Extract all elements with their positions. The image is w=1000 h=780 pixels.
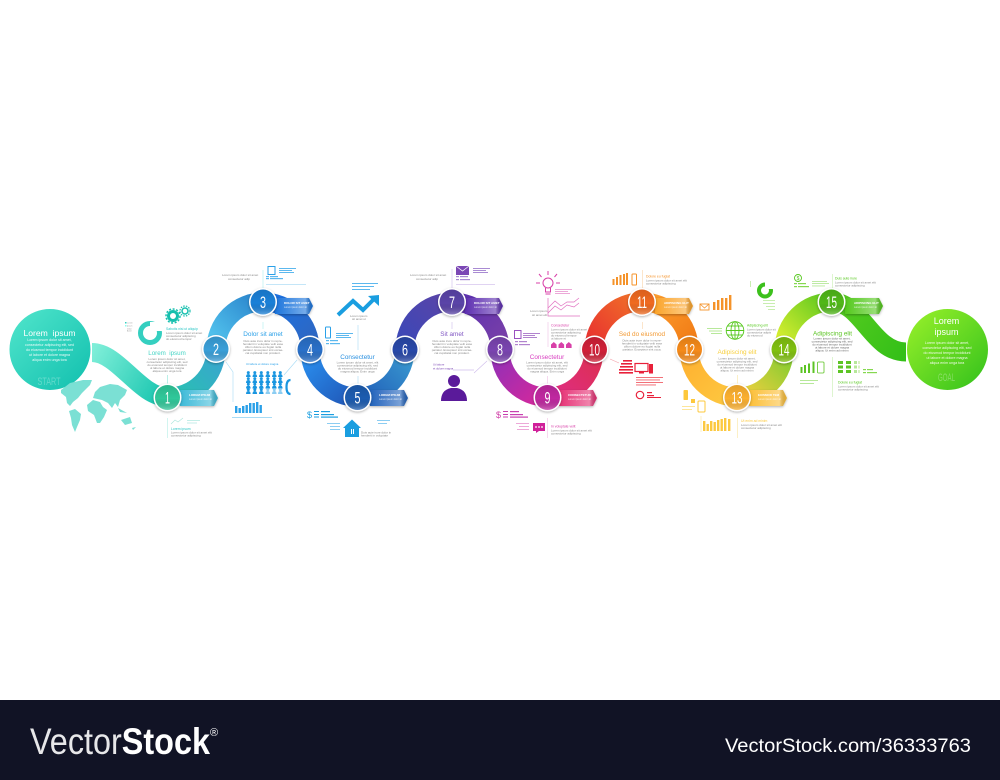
heading: adipiscing elit: Lorem ipsum dolor sit amet, <box>718 356 756 360</box>
connector <box>166 375 168 384</box>
node 6 <box>391 336 419 364</box>
node 7 <box>438 288 466 316</box>
tag 5: Lorem ipsum dolor sit <box>379 398 402 401</box>
heading: sit amet: cat cupidatat non proident. <box>434 351 470 355</box>
start circle: aliqua enim unga tora <box>32 358 67 362</box>
start circle: do eiusmod tempor incididunt <box>26 348 73 352</box>
note: in voluptate velit: In voluptate velit <box>551 424 576 428</box>
globe note: Adipiscing elit <box>747 324 768 328</box>
icon: globe <box>726 322 744 339</box>
note: dolore eu fugiat <box>646 274 687 286</box>
note: consectetur small: Lorem ipsum dolor sit amet <box>551 328 587 332</box>
globe note: do eiusmod <box>747 334 763 338</box>
icon: person <box>441 375 467 401</box>
pie legend: Lorem <box>127 322 133 324</box>
heading: adipiscing elit <box>812 330 853 352</box>
heading: sed do eiusmod: Sed do eiusmod <box>619 331 666 338</box>
tag 7 <box>465 298 503 314</box>
heading: consectetur: magna aliqua. Enim unga <box>530 370 564 374</box>
heading: sed do eiusmod: cillum dolore eu fugiat nulla <box>624 344 661 348</box>
note: consectetur small: Consectetur <box>551 324 570 328</box>
heading: adipiscing elit: ut labore et dolore magna <box>720 366 754 370</box>
heading and body: ut labore et dolore magna <box>150 366 184 370</box>
heading: adipiscing elit: consectetur adipiscing elit, sed <box>812 340 853 344</box>
goal circle: ipsum <box>934 327 959 337</box>
line chart <box>548 298 580 316</box>
icon: dollar coin: $ <box>797 276 800 282</box>
icon: house <box>343 420 361 437</box>
note: duis aute irure: Duis aute irure <box>835 276 857 280</box>
node 9: 9 <box>544 390 550 408</box>
note: dolore eu fugiat: Lorem ipsum dolor sit amet elit <box>838 384 879 388</box>
start circle: START <box>38 376 61 388</box>
goal circle: do eiusmod tempor incididunt <box>924 351 970 355</box>
tag 9: Lorem ipsum dolor sit <box>568 398 591 401</box>
heading and body: aliqua enim unga tora <box>153 369 182 373</box>
node 12 <box>676 336 704 364</box>
note below node 1: Lorem ipsum dolor sit amet elit <box>171 430 212 434</box>
note: in voluptate velit: Lorem ipsum dolor sit amet elit <box>551 428 592 432</box>
note: dolore eu fugiat <box>838 380 879 392</box>
node 4 <box>296 336 324 364</box>
node 4: 4 <box>307 342 313 360</box>
tag 1: Lorem ipsum dolor sit <box>189 398 212 401</box>
heading: sed do eiusmod: Duis aute irure dolor in repre- <box>622 338 662 342</box>
note: consectetur small: consectetur adipiscing <box>551 330 581 334</box>
arrow tags <box>180 298 883 406</box>
step 1 details <box>125 306 212 438</box>
heading and body: do eiusmod tempor incididunt <box>147 363 187 367</box>
chart note: sit amet elit <box>532 313 547 317</box>
note below node 1: Lorem ipsum <box>171 427 191 431</box>
dot grid <box>838 361 877 373</box>
heading: consectetur: consectetur adipiscing elit, sed <box>527 364 568 368</box>
note: dolore eu fugiat: Dolore eu fugiat <box>646 274 670 278</box>
pie legend: Dolor <box>127 328 132 330</box>
top note left: consectetur adip <box>228 277 250 281</box>
tag 7: DOLOR SIT AMET <box>474 301 500 305</box>
heading: adipiscing elit: aliqua. Ut enim ad minim <box>720 368 754 372</box>
note: consectetur small: ut labore et <box>551 336 566 340</box>
node 11: 11 <box>637 294 647 312</box>
heading: sed do eiusmod: henderit in voluptate velit esse <box>622 342 663 346</box>
node 12: 12 <box>684 342 695 360</box>
step 14-15 details <box>750 274 879 397</box>
footer id: VectorStock.com/36333763 <box>725 736 971 757</box>
top note left <box>410 273 446 281</box>
footer logo: VectorStock <box>30 721 210 762</box>
node 7: 7 <box>449 294 455 312</box>
note: in voluptate velit: consectetur adipiscing <box>551 432 581 436</box>
heading: sit amet: Duis aute irure dolor in repre- <box>432 339 472 343</box>
node 3: 3 <box>260 294 266 312</box>
heading: consectetur: do eiusmod tempor incididunt <box>338 366 377 370</box>
footer logo: ® <box>210 727 218 739</box>
note: duis aute irure <box>835 276 876 288</box>
heading: dolor sit amet: pariatur. Excepteur sint occae- <box>243 348 283 352</box>
chart note: Lorem ipsum <box>530 309 548 313</box>
icon: envelope orange <box>700 304 709 310</box>
heading: dolor sit amet: Duis aute irure dolor in repre- <box>243 339 283 343</box>
note: ut enim ad minim <box>741 419 782 430</box>
icon: gears <box>166 306 190 323</box>
node 13: 13 <box>732 390 742 408</box>
heading: dolor sit amet: Dolor sit amet <box>243 331 283 338</box>
coin note <box>794 283 809 287</box>
heading: consectetur: Consectetur <box>530 354 565 361</box>
heading: sed do eiusmod: pariatur. Excepteur sint occa. <box>623 348 662 352</box>
heading: adipiscing elit: do eiusmod tempor incididunt <box>812 342 852 346</box>
envelope note <box>456 268 495 285</box>
note: in voluptate velit <box>551 424 592 436</box>
node 1: 1 <box>165 390 170 408</box>
note: duis aute irure: Lorem ipsum dolor sit amet elit <box>835 280 876 284</box>
heading: dolor sit amet: cat cupidatat non proident. <box>245 351 281 355</box>
globe note: Lorem ipsum dolor sit <box>747 328 776 332</box>
icon: envelope <box>456 266 469 275</box>
note: ut enim ad minim: Ut enim ad minim <box>741 419 768 423</box>
goal circle <box>906 308 988 390</box>
node 10 <box>580 336 608 364</box>
house notes <box>327 420 390 430</box>
note: ut enim ad minim: consectetur adipiscing <box>741 426 771 430</box>
start circle: consectetur adipiscing elit, sed <box>25 343 74 347</box>
step 2-3 details <box>222 266 306 418</box>
top note left: Lorem ipsum dolor sit amet <box>222 273 258 277</box>
red icon: coin with lines <box>636 391 661 399</box>
heading: sit amet: cillum dolore eu fugiat nulla <box>434 345 471 349</box>
person note <box>433 361 487 373</box>
heading: consectetur: consectetur adipiscing elit, sed <box>337 364 378 368</box>
icon: computer stack <box>610 359 653 374</box>
chart note <box>530 309 548 317</box>
heading: dolor sit amet <box>243 331 284 355</box>
person note: Ut labore <box>433 362 445 366</box>
node 9 <box>534 384 562 412</box>
node 2: 2 <box>213 341 219 359</box>
tag 11: ADIPISCING ELIT <box>664 301 689 305</box>
orange bar chart <box>713 295 731 310</box>
tag 9: CONSECTETUR <box>568 393 592 397</box>
tag 7: Lorem ipsum dolor sit <box>474 306 497 309</box>
step 4-5 details <box>307 283 392 438</box>
tag 9 <box>559 390 597 406</box>
goal circle: Lorem <box>934 316 959 326</box>
heading: consectetur <box>526 354 568 374</box>
node 5: 5 <box>354 390 360 408</box>
note: consectetur small: do eiusmod tempor <box>551 334 577 338</box>
goal circle: ut labore et dolore magna <box>927 356 967 360</box>
heading: consectetur <box>337 354 379 374</box>
heading and body <box>147 350 188 373</box>
icon: light bulb <box>536 271 560 294</box>
heading: consectetur: Consectetur <box>340 354 376 361</box>
bulb note <box>555 289 572 294</box>
note below node 1: consectetur adipiscing <box>171 434 201 438</box>
tag 3 <box>275 298 313 314</box>
note: sabotis: do eiusmod tempor <box>166 337 192 341</box>
note: duis aute irure: consectetur adipiscing <box>835 284 865 288</box>
top note left: Lorem ipsum dolor sit amet <box>410 273 446 277</box>
heading: sit amet <box>432 331 473 355</box>
heading: dolor sit amet: cillum dolore eu fugiat nulla <box>245 345 282 349</box>
note: ut enim ad minim: Lorem ipsum dolor sit amet elit <box>741 423 782 427</box>
pie chart <box>140 322 163 342</box>
node 15 <box>818 288 846 316</box>
people grid: Ut labore et dolore magna <box>246 362 279 366</box>
icon: mobile <box>326 327 330 338</box>
heading: consectetur: Lorem ipsum dolor sit amet, elit <box>337 360 379 364</box>
tag 15: Lorem ipsum dolor sit <box>854 306 877 309</box>
node 8 <box>486 336 514 364</box>
icon: dollar with lines <box>307 410 338 420</box>
tag 5 <box>370 390 408 406</box>
person note: et dolore magna <box>433 366 454 370</box>
node 8: 8 <box>497 342 503 360</box>
mobile note <box>326 333 353 344</box>
heading: sed do eiusmod <box>619 331 666 352</box>
top note left: consectetur adip <box>416 277 438 281</box>
goal circle: GOAL <box>938 372 955 384</box>
node 3 <box>249 288 277 316</box>
numbered nodes <box>154 288 846 412</box>
step 4-5 details: henderit in voluptate <box>361 434 388 438</box>
heading and body: consectetur adipiscing elit, sed <box>147 360 188 364</box>
node 2 <box>202 335 230 363</box>
icon: world map <box>61 380 136 432</box>
note: dolore eu fugiat: Lorem ipsum dolor sit amet elit <box>646 278 687 282</box>
heading: adipiscing elit: aliqua. Ut enim ad minim <box>815 348 849 352</box>
pie legend: Amet <box>127 330 132 332</box>
heading: adipiscing elit: ut labore et dolore magna <box>815 346 849 350</box>
icon: three houses <box>551 342 572 348</box>
pie legend: Ipsum <box>127 326 133 328</box>
node 1 <box>154 384 182 412</box>
step 12-13 details <box>682 322 782 438</box>
node 14: 14 <box>778 342 790 360</box>
note: sabotis: Sabotis nisi ut aliquip <box>166 327 198 331</box>
tag 3: Lorem ipsum dolor sit <box>284 306 307 309</box>
step 4-5 details: Duis aute irure dolor in <box>361 430 392 434</box>
step 4-5 details: sit amet ut <box>352 317 366 321</box>
step 10-11 details <box>610 270 731 399</box>
connector and bar chart <box>226 362 272 418</box>
heading: adipiscing elit: Lorem ipsum dolor sit amet, <box>813 336 851 340</box>
node 15: 15 <box>826 294 837 312</box>
pie note <box>750 281 775 310</box>
tag 13: EIUSMOD TEM <box>758 393 780 397</box>
note: sabotis <box>166 327 202 341</box>
heading: consectetur: magna aliqua. Enim unga <box>340 370 375 374</box>
start circle: Lorem ipsum dolor sit amet, <box>27 338 72 342</box>
note: dolore eu fugiat: Dolore eu fugiat <box>838 380 862 384</box>
top note right <box>266 268 306 285</box>
note: dolore eu fugiat: consectetur adipiscing <box>838 388 868 392</box>
step 8-9 details <box>496 271 592 438</box>
heading: adipiscing elit: consectetur adipiscing elit, sed <box>717 360 758 364</box>
icon: document <box>268 266 275 274</box>
heading: dolor sit amet: henderit in voluptate velit esse <box>243 342 284 346</box>
orange bars and phone <box>612 273 636 285</box>
heading: sit amet: pariatur. Excepteur sint occae- <box>432 348 472 352</box>
note below node 1 <box>168 418 212 438</box>
note: sabotis: consectetur adipiscing <box>166 334 196 338</box>
globe note: consectetur adipis <box>747 330 772 334</box>
heading: sit amet: Sit amet <box>440 331 464 338</box>
goal circle: consectetur adipiscing elit, sed <box>923 346 971 350</box>
icon: dollar with lines <box>496 410 528 420</box>
people grid <box>246 362 283 394</box>
heading: consectetur: Lorem ipsum dolor sit amet, elit <box>526 360 568 364</box>
tag 13 <box>749 390 787 406</box>
node 13 <box>723 384 751 412</box>
icon: phone handset <box>286 380 290 394</box>
heading and body: Lorem ipsum <box>148 350 186 357</box>
tag 15 <box>845 298 883 314</box>
tag 15: ADIPISCING ELIT <box>854 301 879 305</box>
heading: consectetur: do eiusmod tempor incididunt <box>527 366 567 370</box>
red note <box>636 377 663 385</box>
footer bar <box>0 700 1000 780</box>
heading: adipiscing elit: Adipiscing elit <box>813 330 852 338</box>
yellow bar chart <box>701 416 730 432</box>
icon: doc <box>514 330 521 338</box>
step 6-8 details <box>410 266 540 401</box>
pie legend <box>125 322 133 332</box>
globe note <box>747 324 776 338</box>
goal circle: aliqua enim unga tora <box>930 361 964 365</box>
tag 1: LOREM IPSUM <box>189 393 211 397</box>
icon: rising arrow <box>338 295 379 315</box>
node 10: 10 <box>589 342 600 360</box>
goal circle: Lorem ipsum dolor sit amet, <box>925 341 969 345</box>
arrow note <box>352 283 378 290</box>
heading: adipiscing elit <box>717 349 758 372</box>
chat note <box>516 423 529 430</box>
green bars and tablet <box>800 362 824 373</box>
green pie chart <box>759 282 775 296</box>
node 11 <box>628 288 656 316</box>
node 5 <box>344 384 372 412</box>
heading: sit amet: henderit in voluptate velit esse <box>432 342 473 346</box>
tag 5: LOREM IPSUM <box>379 393 401 397</box>
tag 11 <box>655 298 693 314</box>
heading and body: Lorem ipsum dolor sit amet, <box>148 357 186 361</box>
heading: adipiscing elit: Adipiscing elit <box>717 349 757 356</box>
tag 11: Lorem ipsum dolor sit <box>664 306 687 309</box>
yellow devices <box>682 390 705 412</box>
note: dolore eu fugiat: consectetur adipiscing <box>646 282 676 286</box>
tag 13: Lorem ipsum dolor sit <box>758 398 781 401</box>
start circle: ut labore et dolore magna <box>29 353 70 357</box>
heading: adipiscing elit: do eiusmod tempor incididunt <box>717 362 757 366</box>
top note left <box>222 273 258 281</box>
doc note <box>515 333 540 345</box>
step 4-5 details: Lorem ipsum <box>350 314 368 318</box>
icon: dollar with lines: $ <box>307 410 312 420</box>
node 14 <box>770 336 798 364</box>
tag 3: DOLOR SIT AMET <box>284 301 310 305</box>
icon: chat bubble <box>533 423 545 433</box>
node 6: 6 <box>402 342 408 360</box>
start circle <box>9 308 91 390</box>
ribbon: winding timeline path <box>92 302 906 397</box>
note: sabotis: Lorem ipsum dolor sit amet <box>166 331 202 335</box>
icon: dollar with lines: $ <box>496 410 501 420</box>
tag 1 <box>180 390 218 406</box>
start circle: Lorem ipsum <box>23 328 76 338</box>
note: consectetur small <box>551 324 587 340</box>
